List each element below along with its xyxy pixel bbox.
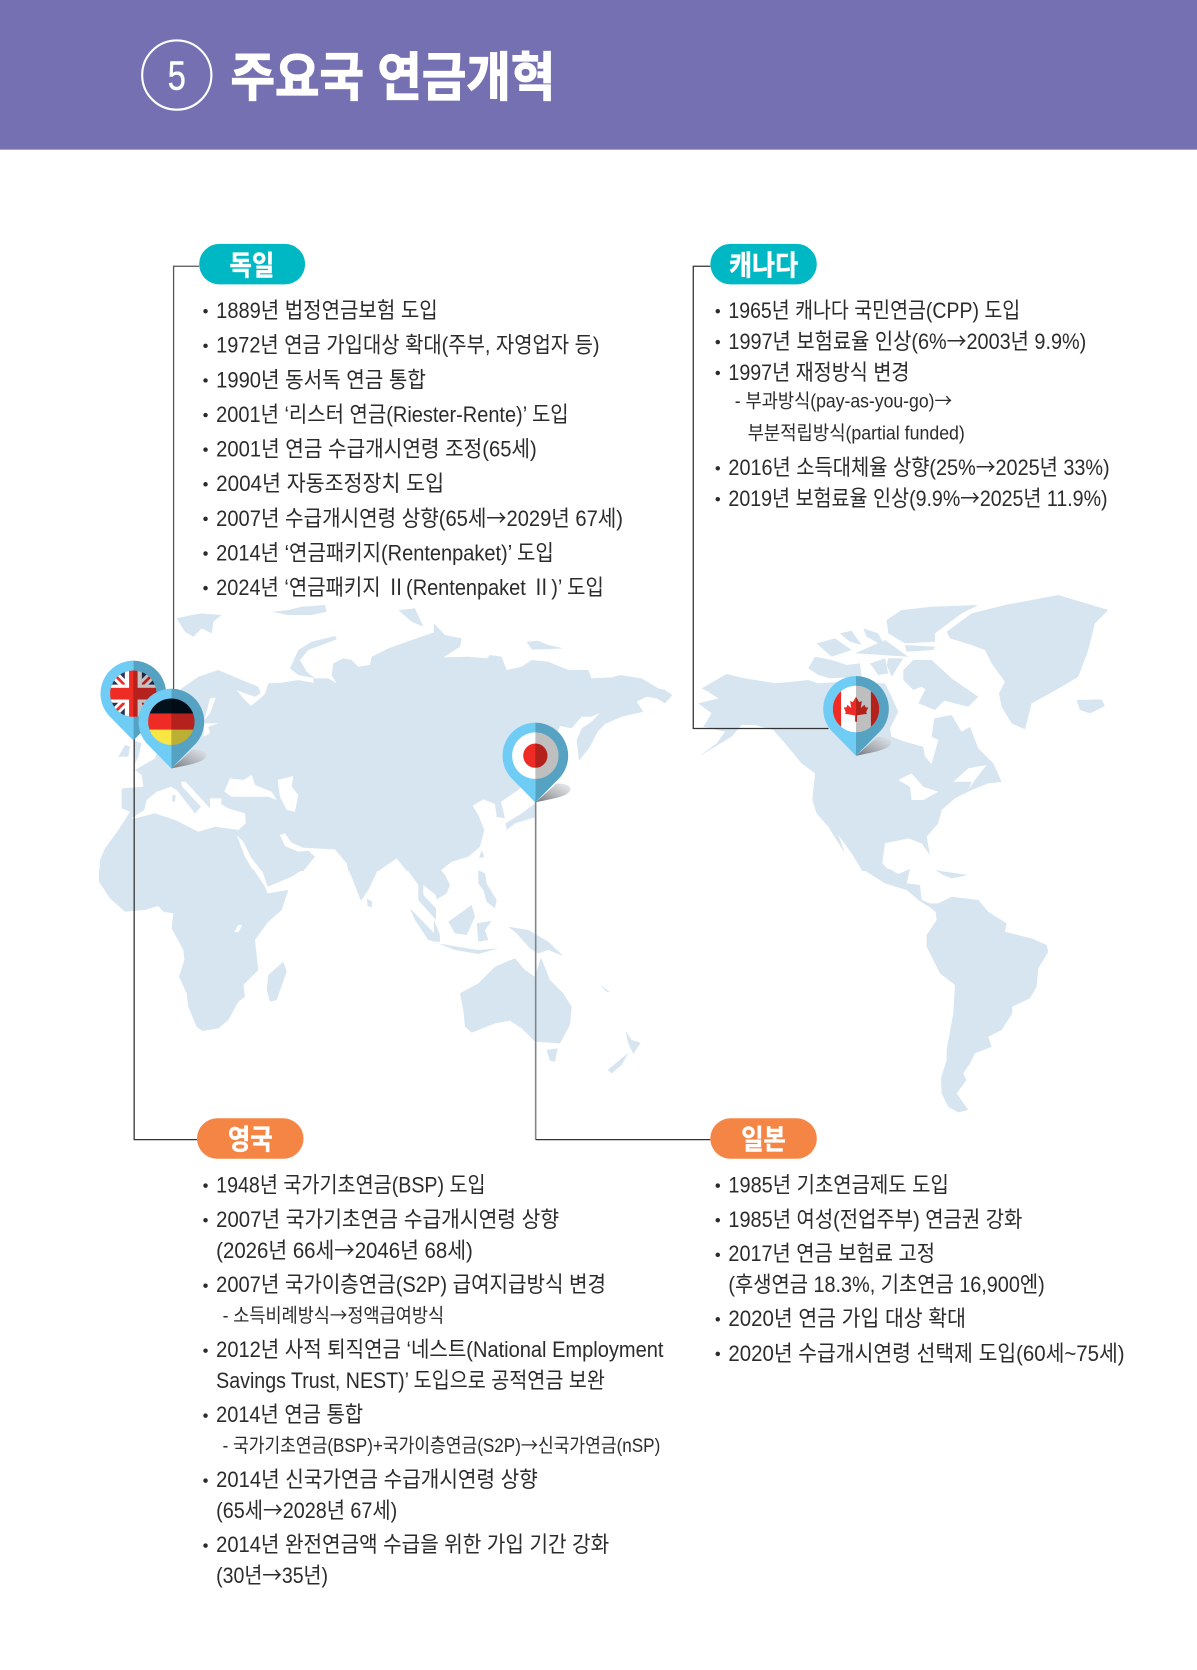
list: UK milestones: (30년→35년) bbox=[216, 1558, 328, 1590]
section number badge: 5 bbox=[168, 52, 186, 98]
list: UK milestones: 2014년 신국가연금 수급개시연령 상향 bbox=[216, 1467, 538, 1492]
list: UK milestones: 2007년 국가이층연금(S2P) 급여지급방식 변경 bbox=[216, 1272, 606, 1297]
list: Canada milestones: 2019년 보험료율 인상(9.9%→2025년 11.9%) bbox=[728, 481, 1108, 513]
lakes bbox=[898, 765, 987, 800]
list: Canada sub-items: 부분적립방식(partial funded) bbox=[748, 423, 965, 445]
list: Germany milestones: 2001년 ‘리스터 연금(Riester-Rente)’ 도입 bbox=[216, 402, 569, 427]
panel: Canada bbox=[710, 244, 1110, 513]
list: Canada sub-items bbox=[735, 386, 965, 445]
label: United Kingdom: 영국 bbox=[228, 1124, 273, 1155]
label: Canada bbox=[710, 244, 817, 284]
list: Germany milestones bbox=[203, 298, 623, 600]
list: UK milestones: 2007년 국가기초연금 수급개시연령 상향 bbox=[216, 1207, 559, 1232]
list: Germany milestones: 2007년 수급개시연령 상향(65세→2029년 67세) bbox=[216, 501, 623, 533]
header band bbox=[0, 0, 1197, 150]
label: Germany bbox=[199, 244, 305, 284]
list: Japan milestones: 1985년 여성(전업주부) 연금권 강화 bbox=[728, 1207, 1022, 1232]
label: Japan bbox=[710, 1118, 817, 1159]
list: Canada milestones: 1965년 캐나다 국민연금(CPP) 도입 bbox=[728, 298, 1020, 323]
map: eastern Asia, Alaska bbox=[434, 623, 776, 871]
list: UK milestones: (2026년 66세→2046년 68세) bbox=[216, 1233, 473, 1265]
list: Germany milestones: 2024년 ‘연금패키지 Ⅱ(Rentenpaket Ⅱ)’ 도입 bbox=[216, 575, 604, 600]
list: Japan milestones: 2020년 연금 가입 대상 확대 bbox=[728, 1306, 966, 1331]
panel: United Kingdom bbox=[197, 1118, 664, 1590]
list: UK milestones: (65세→2028년 67세) bbox=[216, 1493, 397, 1525]
list: Japan milestones: 2017년 연금 보험료 고정 bbox=[728, 1241, 935, 1266]
list: Germany milestones: 1990년 동서독 연금 통합 bbox=[216, 367, 426, 392]
label: Canada: 캐나다 bbox=[729, 250, 798, 281]
list: UK milestones: 2014년 완전연금액 수급을 위한 가입 기간 강화 bbox=[216, 1532, 609, 1557]
list: Japan milestones: 2020년 수급개시연령 선택제 도입(60세~75세) bbox=[728, 1341, 1125, 1366]
list: UK milestones: Savings Trust, NEST)’ 도입으로 공적연금 보완 bbox=[216, 1368, 605, 1393]
list: UK sub-items bbox=[223, 1300, 660, 1458]
list: Germany milestones: 2014년 ‘연금패키지(Rentenpaket)’ 도입 bbox=[216, 540, 554, 565]
map: Canada, Greenland, United States bbox=[774, 595, 1108, 871]
list: Japan milestones: (후생연금 18.3%, 기초연금 16,900엔) bbox=[728, 1272, 1045, 1297]
panel: Germany bbox=[199, 244, 623, 600]
pin: United Kingdom bbox=[101, 661, 166, 741]
seas bbox=[131, 782, 246, 832]
list: Germany milestones: 2004년 자동조정장치 도입 bbox=[216, 471, 444, 496]
map: Central and South America bbox=[862, 869, 1048, 1112]
pin: Canada bbox=[823, 676, 891, 756]
world map bbox=[99, 595, 1108, 1112]
pin: Germany bbox=[139, 689, 206, 769]
label: United Kingdom bbox=[197, 1118, 304, 1159]
list: UK sub-items: - 국가기초연금(BSP)+국가이층연금(S2P)→신국가연금(nSP) bbox=[223, 1430, 660, 1458]
list: Canada milestones: 2016년 소득대체율 상향(25%→2025년 33%) bbox=[728, 450, 1110, 482]
list: Canada milestones: 1997년 보험료율 인상(6%→2003년 9.9%) bbox=[728, 324, 1086, 356]
list: Germany milestones: 1972년 연금 가입대상 확대(주부, 자영업자 등) bbox=[216, 333, 600, 358]
list: Canada sub-items: - 부과방식(pay-as-you-go)→ bbox=[735, 386, 952, 414]
list: Germany milestones: 1889년 법정연금보험 도입 bbox=[216, 298, 438, 323]
label: Japan: 일본 bbox=[741, 1124, 786, 1155]
list: UK milestones: 2012년 사적 퇴직연금 ‘네스트(National Employment bbox=[216, 1337, 664, 1362]
pin: Japan bbox=[503, 723, 570, 803]
list: Japan milestones: 1985년 기초연금제도 도입 bbox=[728, 1173, 949, 1198]
panel: Japan bbox=[710, 1118, 1125, 1366]
list: UK milestones bbox=[203, 1173, 664, 1590]
list: Germany milestones: 2001년 연금 수급개시연령 조정(65세) bbox=[216, 437, 537, 462]
map: southern Africa, India, Madagascar bbox=[99, 869, 436, 1031]
list: Canada milestones: 1997년 재정방식 변경 bbox=[728, 360, 909, 385]
list: UK sub-items: - 소득비례방식→정액급여방식 bbox=[223, 1300, 444, 1328]
map: Europe, western Asia, north Africa bbox=[100, 605, 436, 871]
list: UK milestones: 1948년 국가기초연금(BSP) 도입 bbox=[216, 1173, 486, 1198]
map: southeast Asia, Oceania bbox=[434, 869, 641, 1073]
connector lines bbox=[134, 266, 829, 1140]
title: 주요국 연금개혁 bbox=[231, 49, 555, 107]
label: Germany: 독일 bbox=[229, 250, 274, 281]
section number badge bbox=[142, 40, 211, 110]
list: Japan milestones bbox=[716, 1173, 1125, 1366]
list: Canada milestones bbox=[716, 298, 1110, 513]
list: UK milestones: 2014년 연금 통합 bbox=[216, 1402, 363, 1427]
